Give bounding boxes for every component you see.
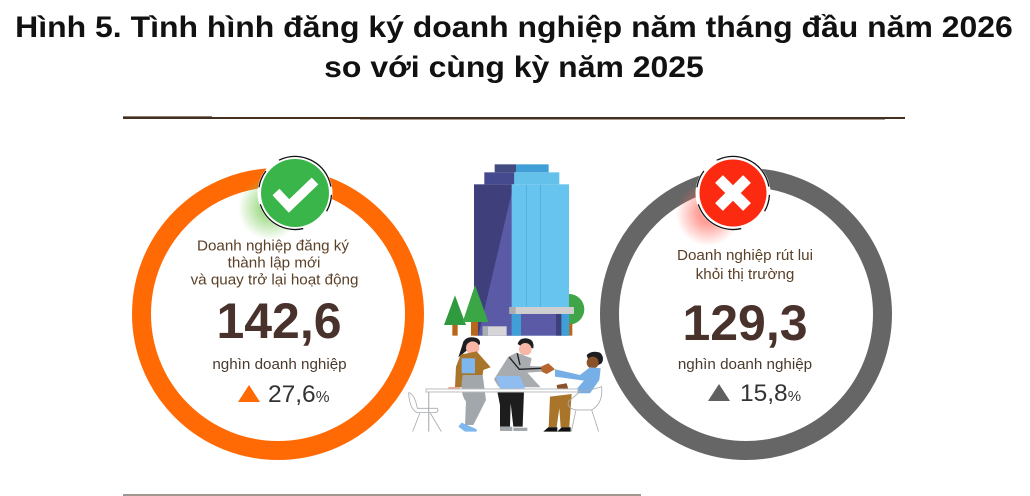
unit: nghìn doanh nghiệp [678,356,812,373]
right chair [568,387,602,432]
value 142,6: 142,6 [216,293,342,349]
title: Hình 5. Tình hình đăng ký doanh nghiệp năm tháng đầu năm 2026 [15,11,1013,44]
description text: Doanh nghiệp rút lui [677,247,813,264]
change 15,8% [708,380,801,407]
description text: Doanh nghiệp đăng ký [197,238,349,254]
change 27,6%: 27,6% [268,381,330,408]
title: so với cùng kỳ năm 2025 [324,51,704,84]
description text: khỏi thị trường [696,266,794,283]
trees [444,285,488,336]
left chair [409,393,441,432]
icon: red cross badge [676,144,782,246]
description text: và quay trở lại hoạt động [191,272,358,288]
orange ring [142,178,414,450]
person with tablet [448,337,491,432]
value 129,3: 129,3 [682,295,808,351]
illustration: office building and handshake meeting [409,164,603,432]
change 15,8%: 15,8% [740,380,801,407]
meeting table [426,389,578,432]
description text: thành lập mới [228,254,320,272]
panel: enterprises exiting the market [610,144,882,450]
description text [191,238,358,288]
change 27,6% [238,381,330,408]
seated person in blue shirt [543,352,603,432]
title [15,11,1013,84]
people and table [426,337,603,432]
description text [677,247,813,283]
unit: nghìn doanh nghiệp [212,356,347,373]
icon: green check badge [238,144,344,242]
person shaking hands in grey jacket [494,338,555,431]
grey ring [610,178,882,450]
building [474,164,584,336]
panel: newly registered enterprises [142,144,414,450]
